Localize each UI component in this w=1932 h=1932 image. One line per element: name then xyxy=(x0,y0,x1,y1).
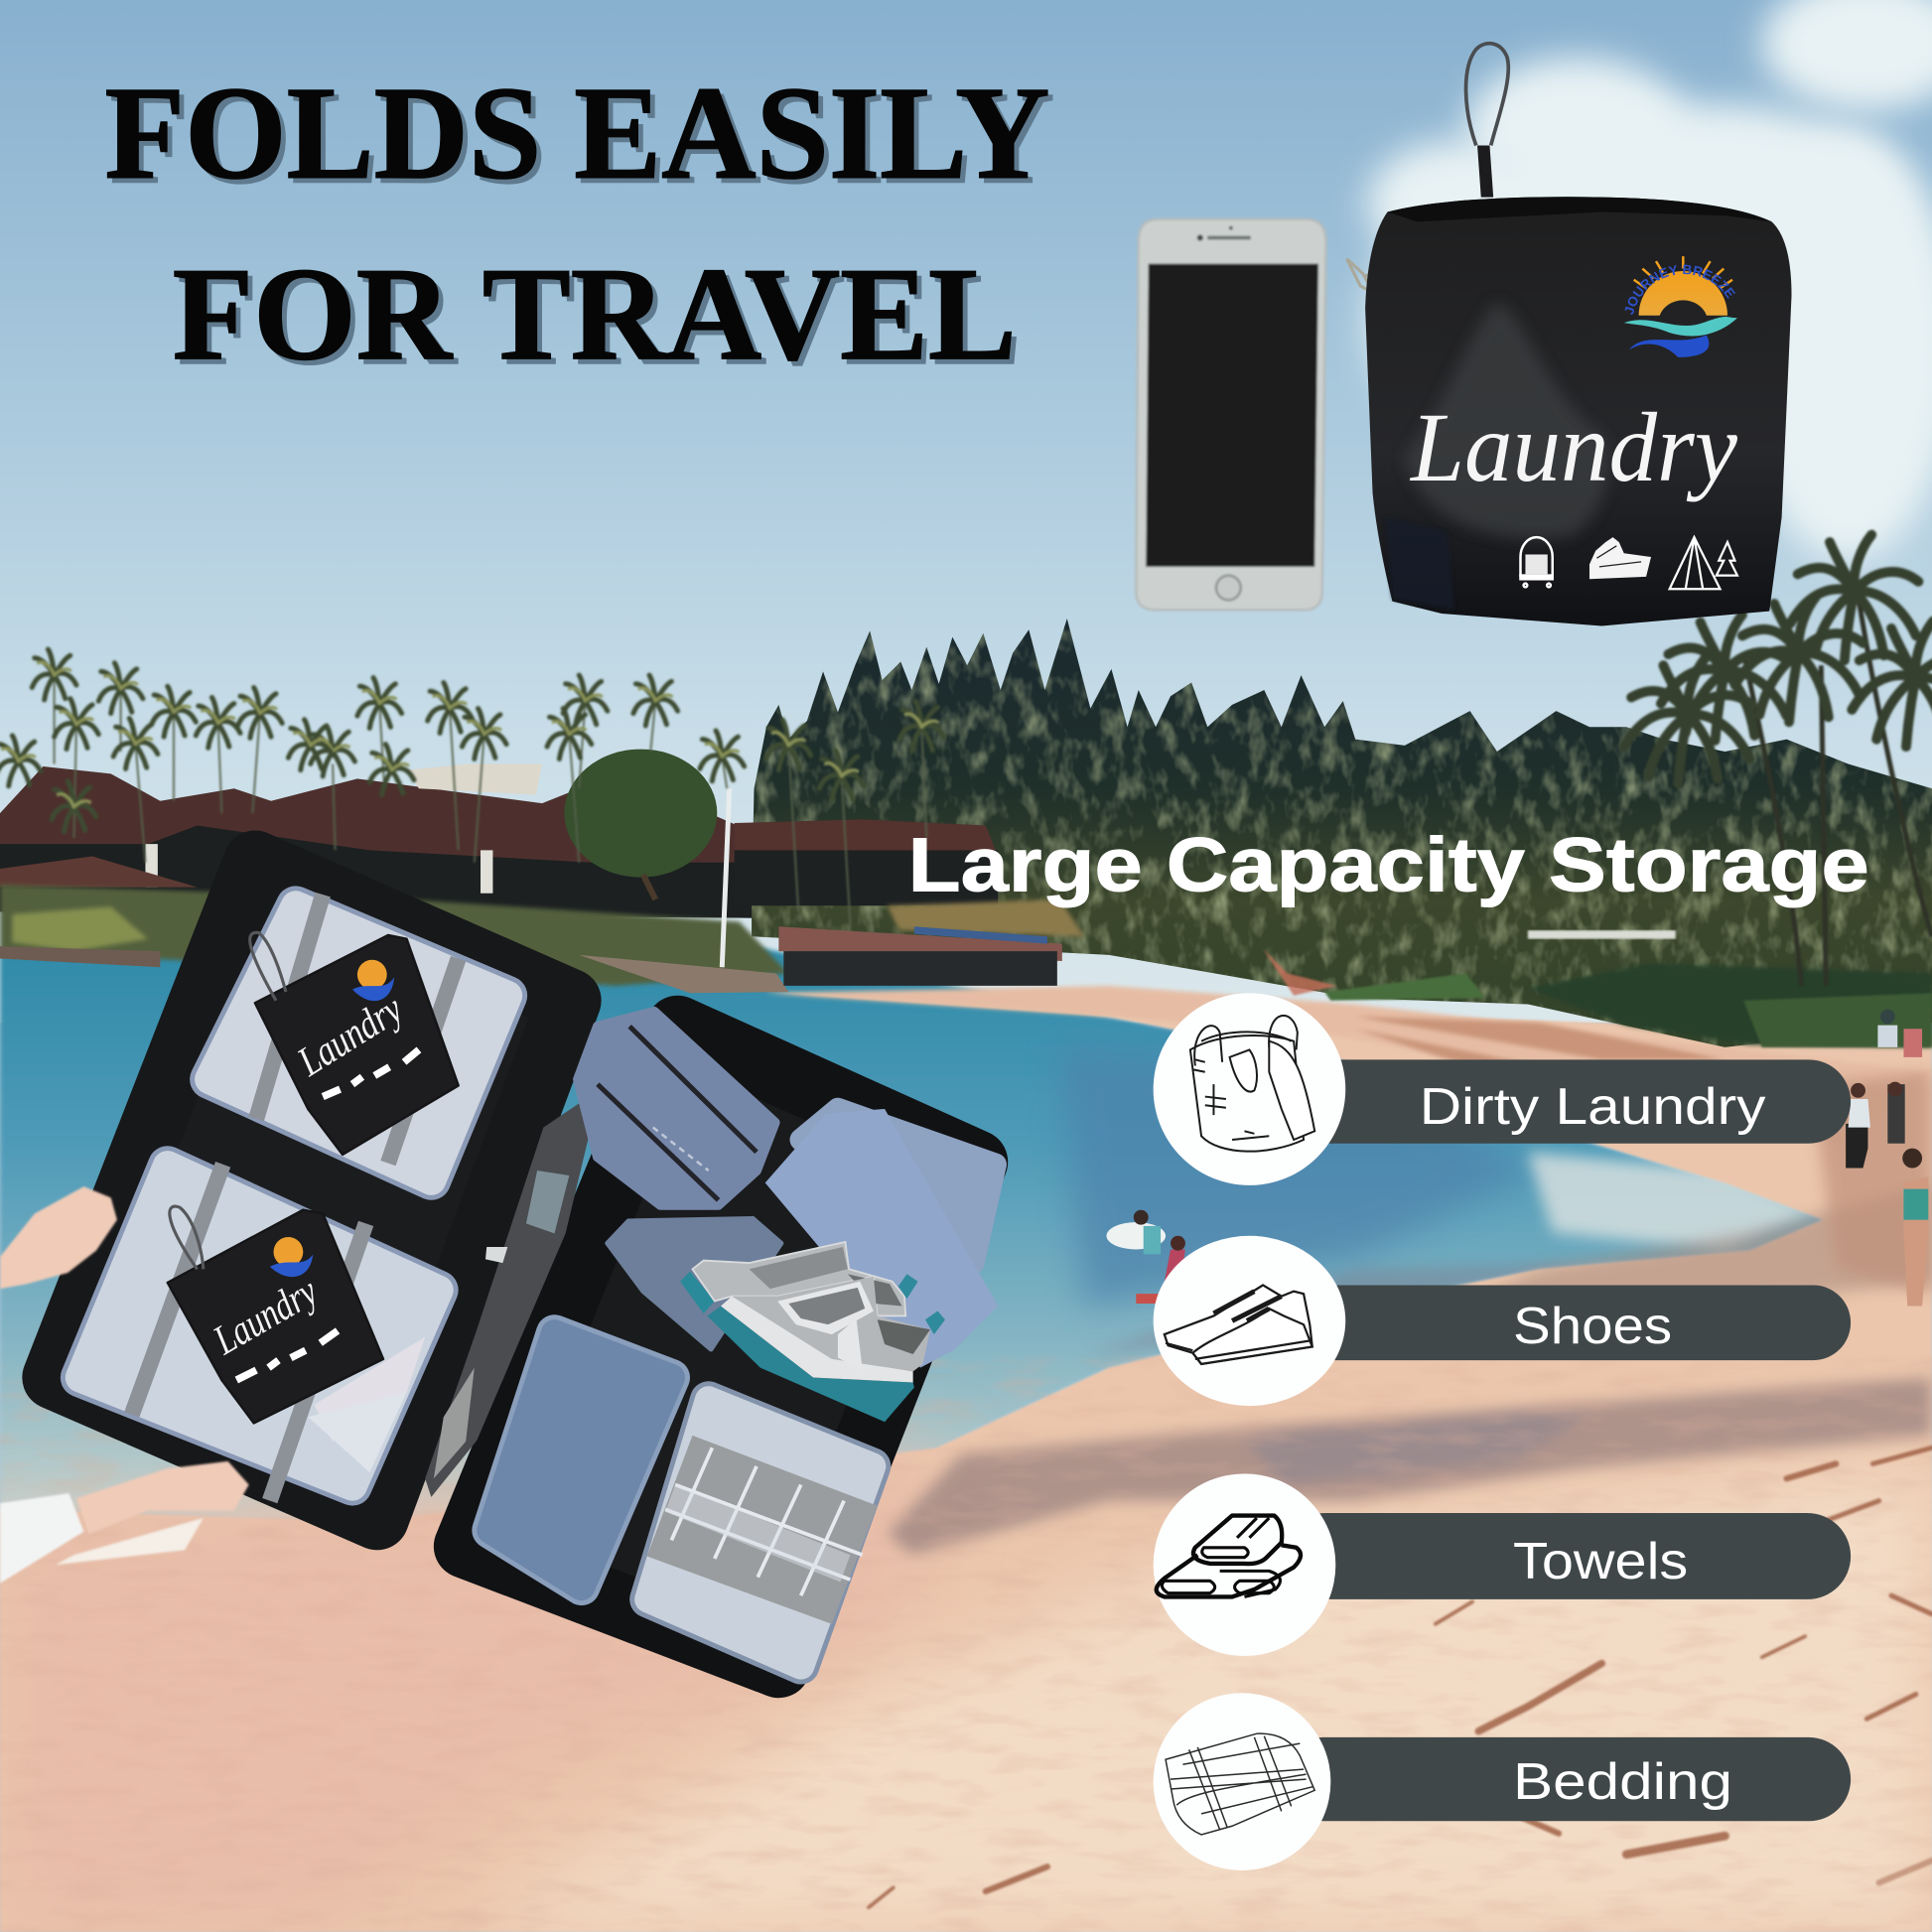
sneaker: back xyxy=(680,1242,918,1315)
phone for size comparison xyxy=(1136,219,1325,610)
small laundry bag: lower: Laundry xyxy=(206,1268,326,1364)
sand xyxy=(0,992,1932,1932)
icon circle xyxy=(1154,1473,1335,1656)
resort buildings left xyxy=(0,763,752,918)
bag icon: cruise ship xyxy=(1589,537,1651,579)
broadleaf tree xyxy=(564,750,717,899)
icon circle xyxy=(1154,1693,1330,1870)
title line: folds easily: FOLDS EASILY xyxy=(109,65,1054,211)
swimmers and beachgoers xyxy=(1106,1009,1928,1307)
title line: folds easily: FOLDS EASILY xyxy=(104,60,1049,207)
label: Shoes xyxy=(1513,1298,1672,1355)
bag icon: tent and pine xyxy=(1670,537,1737,589)
beach footprints xyxy=(869,1448,1932,1907)
large capacity heading: Large Capacity Storage xyxy=(908,822,1869,907)
flagpole xyxy=(722,788,730,967)
pill xyxy=(1282,1737,1851,1821)
brand logo: journey breeze xyxy=(1624,256,1737,357)
small laundry bag: upper xyxy=(250,932,459,1155)
drawstring bag: large xyxy=(578,1012,775,1205)
small laundry bag: upper: Laundry xyxy=(289,986,411,1086)
shore vegetation right xyxy=(1528,964,1932,1047)
icon: laundry basket xyxy=(1190,1016,1314,1152)
brand logo: journey breeze: JOURNEY BREEZE xyxy=(1624,264,1735,315)
suitcase left shell xyxy=(55,863,569,1518)
label: Dirty Laundry xyxy=(1420,1078,1765,1136)
title line: for travel: FOR TRAVEL xyxy=(173,240,1017,387)
open suitcase xyxy=(0,863,998,1666)
zipper pull xyxy=(1346,259,1376,293)
divider panel xyxy=(425,1089,600,1497)
icon: folded blanket xyxy=(1166,1733,1314,1835)
packing cube: lower left xyxy=(80,1165,439,1501)
label: Bedding xyxy=(1513,1753,1732,1811)
palm trees right xyxy=(1624,535,1932,986)
pill xyxy=(1282,1059,1851,1144)
cartoon sneakers xyxy=(680,1242,945,1422)
sea xyxy=(0,949,1824,1522)
drawstring bag: small xyxy=(608,1218,781,1349)
clouds xyxy=(1368,0,1932,561)
suitcase right shell xyxy=(466,1028,976,1666)
packing cube: grey check xyxy=(647,1400,878,1666)
icon: sneakers xyxy=(1165,1285,1312,1364)
sneaker: front xyxy=(707,1277,945,1422)
shore gardens xyxy=(0,885,788,986)
palm trees left xyxy=(0,649,944,924)
storage list item: bedding xyxy=(1154,1693,1851,1870)
label: Towels xyxy=(1513,1533,1688,1590)
waterfront pavilion xyxy=(778,926,1062,986)
title xyxy=(104,60,1054,392)
storage list item: dirty laundry xyxy=(1154,993,1851,1185)
bag body xyxy=(1365,197,1792,625)
sand: cream area xyxy=(469,1466,1932,1932)
packing cube: dark blue xyxy=(490,1333,671,1587)
wet sand band xyxy=(888,1378,1932,1555)
icon circle xyxy=(1154,1236,1345,1406)
icon: rolled towels xyxy=(1157,1516,1301,1596)
bag icon: luggage cart xyxy=(1519,537,1554,587)
packing cube: blue flat xyxy=(765,1109,998,1368)
background tree line xyxy=(752,619,1932,1047)
hand: lower with sleeve xyxy=(0,1461,249,1584)
sand: upper beach xyxy=(763,986,1932,1146)
icon circle xyxy=(1154,993,1345,1185)
storage list item: shoes xyxy=(1154,1236,1851,1406)
pill xyxy=(1294,1285,1851,1360)
title line: for travel: FOR TRAVEL xyxy=(178,245,1022,392)
resort buildings right xyxy=(735,819,998,905)
bag label text: Laundry xyxy=(1409,394,1738,502)
storage list item: towels xyxy=(1154,1473,1851,1656)
pill xyxy=(1282,1513,1851,1599)
small laundry bag: lower xyxy=(168,1206,383,1423)
sky xyxy=(0,0,1932,1023)
sand: pink band xyxy=(0,1453,936,1932)
packing cube: upper left xyxy=(209,895,507,1180)
hand: left xyxy=(0,1186,117,1289)
folded laundry bag xyxy=(1345,42,1791,625)
carabiner clip xyxy=(1466,44,1508,198)
